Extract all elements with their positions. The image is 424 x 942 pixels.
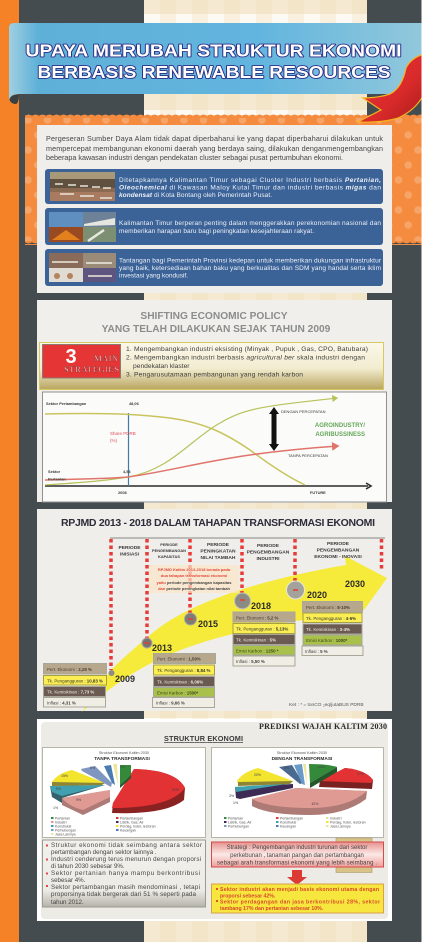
chart: tanpa transformasi — [42, 748, 206, 838]
text block: tanpa transformasi notes: proporsinya tidak bergerak dari 51 % seperti pada — [51, 891, 197, 898]
strategies box — [40, 342, 384, 390]
chart labels — [46, 401, 328, 495]
callout: hasil — [212, 884, 384, 913]
legend: Konstruksi — [280, 820, 297, 824]
pie slices — [235, 764, 373, 815]
table 2013 — [152, 654, 216, 708]
pie labels: 3% — [229, 794, 234, 798]
card 2 — [45, 208, 383, 245]
legend: Pertambangan — [280, 816, 303, 820]
pie labels: 20% — [254, 773, 261, 777]
label: agroindustry: AGROINDUSTRY/ — [315, 423, 365, 429]
card 3 text: yang baik, ketersediaan bahan baku yang berkualitas dan SDM yang handal serta iklim — [119, 265, 381, 272]
period headers: PERIODE — [327, 541, 350, 547]
legend — [51, 816, 156, 836]
arrow: yellow growth — [82, 556, 387, 712]
period headers: PENGEMBANGAN — [247, 550, 290, 556]
panel: prediksi — [37, 719, 392, 921]
period headers: NILAI TAMBAH — [201, 555, 236, 561]
title text — [26, 40, 402, 82]
chart labels: 2008 — [118, 490, 127, 495]
text block: tanpa transformasi notes: Industri cenderung terus menurun dengan proporsi — [51, 856, 201, 863]
table 2009: Tk. Kemiskinan : 7,73 % — [47, 690, 94, 694]
label: share pdrb: Share PDRB — [110, 431, 136, 436]
chart labels: Sektor — [48, 469, 61, 474]
pie labels: 1% — [233, 801, 238, 805]
white right margin strip — [422, 0, 424, 942]
table 2020: Tk. Kemiskinan : 3-4% — [306, 627, 350, 632]
chart: dengan transformasi: DENGAN TRANSFORMASI — [272, 756, 333, 762]
pie slices — [50, 764, 185, 815]
milestone years: 2030 — [345, 579, 365, 589]
card 1 text: Oleochemical di Kawasan Maloy Kutai Timur dan industri berbasis migas dan — [119, 184, 381, 192]
callout: hasil: Sektor perdagangan dan jasa berkontribusi 28%, sektor — [220, 900, 380, 906]
legend: Konstruksi — [55, 824, 72, 828]
legend: Jasa Lainnya — [330, 824, 351, 828]
card 3 text: Tantangan bagi Pemerintah Provinsi kedepan untuk memberikan dukungan infrastruktur — [119, 258, 382, 264]
label: agroindustry: AGRIBUSSINESS — [315, 432, 365, 438]
heading: SHIFTING ECONOMIC POLICY — [140, 311, 288, 322]
callout: strategi — [212, 842, 384, 867]
strategy list: pendekatan klaster — [133, 363, 190, 370]
strategy list — [126, 346, 368, 378]
heading — [102, 311, 331, 335]
timeline rule — [110, 537, 385, 539]
table 2020: Pert. Ekonomi : 8-10% — [306, 605, 350, 610]
card 3 text: investasi yang kondusif. — [119, 272, 188, 280]
pie labels: 5% — [284, 766, 289, 770]
milestones — [108, 581, 304, 676]
legend: Pertambangan — [120, 816, 143, 820]
text block: tanpa transformasi notes: Struktur ekonomi tidak seimbang antara sektor — [51, 842, 202, 849]
label: share pdrb: (%) — [110, 438, 117, 443]
legend: Pertanian — [228, 816, 243, 820]
pie labels: 1% — [53, 806, 58, 810]
period headers: PERIODE — [207, 542, 230, 548]
legend: Industri — [330, 816, 342, 820]
table 2013: Pert. Ekonomi : 1,59% — [157, 656, 201, 662]
table 2018: Emisi Karbon : 1250 * — [236, 648, 279, 654]
chart: tanpa transformasi: TANPA TRANSFORMASI — [94, 756, 150, 762]
chart labels: FUTURE — [310, 490, 326, 495]
callout: strategi: Strategi : Pengembangan industri turunan dari sektor — [227, 845, 367, 851]
arrow: down — [287, 870, 307, 885]
milestone years: 2020 — [307, 590, 327, 600]
card 2 text: Kalimantan Timur berperan penting dalam menggerakkan perekonomian nasional dan — [119, 220, 381, 227]
legend: Industri — [55, 820, 67, 824]
badge: 3 main strategies: 3 — [65, 346, 77, 368]
pie labels: 42% — [311, 802, 319, 806]
heading: YANG TELAH DILAKUKAN SEJAK TAHUN 2009 — [102, 324, 331, 335]
text block: tanpa transformasi notes: pertambangan dengan sektor lainnya . — [51, 849, 157, 856]
table 2020: Inflasi : 5 % — [305, 649, 328, 654]
table 2018: Pert. Ekonomi : 5,2 % — [236, 616, 279, 620]
table 2018: Tk. Kemiskinan : 5% — [236, 638, 276, 642]
curve: tanpa percepatan — [45, 446, 338, 480]
panel: orange dotted backing — [25, 114, 424, 245]
legend: Jasa Lainnya — [55, 832, 76, 836]
photo: energy collage — [49, 212, 116, 242]
badge: 3 main strategies — [42, 344, 120, 378]
legend: Listrik, Gas, Air — [120, 820, 144, 824]
legend: Pertanian — [55, 816, 70, 820]
table 2009: Tk. Pengangguran : 10,83 % — [47, 678, 103, 684]
text block: tanpa transformasi notes — [42, 840, 206, 907]
panel: shifting economic policy — [37, 300, 392, 502]
text block: tanpa transformasi notes: Sektor pertanian hanya mampu berkontribusi — [51, 870, 200, 877]
milestone years: 2015 — [198, 619, 218, 629]
callout: rpjmd note: yaitu periode pengembangan kapasitas — [157, 580, 232, 585]
table 2020 — [302, 602, 363, 656]
callout: hasil: Sektor industri akan menjadi basis ekonomi utama dengan — [220, 887, 379, 893]
legend: Perhubungan — [228, 824, 249, 828]
card 3 — [45, 249, 383, 286]
legend: Keuangan — [120, 828, 136, 832]
strategy list: 2. Mengembangkan industri berbasis agricultural ber skala industri dengan — [126, 354, 365, 362]
milestone years: 2009 — [115, 674, 135, 684]
legend: Perdag, hotel, restoran — [120, 824, 156, 828]
period headers: PENGEMBANGAN — [317, 548, 360, 554]
period headers: INISIASI — [120, 552, 140, 558]
period headers — [118, 541, 362, 562]
pie labels: 5% — [56, 787, 61, 791]
table 2009 — [44, 664, 106, 707]
table 2018 — [233, 612, 295, 666]
chart: dengan transformasi — [212, 748, 384, 838]
period dividers — [111, 539, 382, 670]
panel: intro — [37, 125, 392, 293]
card 1 text — [119, 177, 381, 199]
period headers: PERIODE — [160, 542, 178, 547]
pie labels: 51% — [172, 788, 179, 792]
period headers: KAPASITAS — [158, 554, 180, 559]
callout: strategi: perkebunan , tanaman pangan dan pertambangan — [230, 853, 364, 859]
icon: double arrow — [269, 407, 279, 451]
line chart: sector share curves — [42, 392, 386, 502]
pie labels — [53, 765, 179, 810]
curve: sektor pertambangan — [45, 413, 305, 485]
callout: rpjmd note — [149, 565, 239, 593]
table 2013: Inflasi : 9,66 % — [156, 700, 185, 706]
title ribbon — [9, 23, 424, 104]
callout: rpjmd note: dan periode peningkatan nilai tambah — [158, 586, 230, 591]
heading: RPJMD 2013 - 2018 DALAM TAHAPAN TRANSFORMASI EKONOMI — [61, 517, 375, 529]
table 2018: Inflasi : 5,50 % — [236, 659, 265, 664]
text block: tanpa transformasi notes: Sektor pertambangan masih mendominasi , tetapi — [51, 884, 200, 891]
pie labels: 17% — [357, 772, 364, 776]
pie labels — [229, 765, 364, 806]
intro text: mempercepat membangunan ekonomi daerah yang berdaya saing, dilakukan denganmengembangkan — [46, 144, 383, 153]
period headers: PERIODE — [118, 545, 141, 551]
badge: 3 main strategies: MAIN — [94, 353, 118, 363]
milestone years: 2018 — [251, 601, 271, 611]
card 1 text: Ditetapkannya Kalimantan Timur sebagai Cluster Industri berbasis Pertanian, — [119, 177, 381, 184]
chart labels: 48,06 — [129, 401, 140, 406]
table 2013: Tk. Kemiskinan : 6,06% — [157, 680, 203, 684]
photo: infrastructure collage — [49, 253, 116, 282]
title text: UPAYA MERUBAH STRUKTUR EKONOMI — [26, 40, 402, 60]
table 2018: Tk. Pengangguran : 5,13% — [236, 626, 288, 632]
strategy list: 3. Pengarusutamaan pembangunan yang rendah karbon — [126, 372, 303, 378]
period headers: PENINGKATAN — [200, 548, 236, 554]
pie labels: 8% — [90, 766, 95, 770]
table 2020: Tk. Pengangguran : 4-6% — [306, 616, 356, 621]
legend — [224, 816, 366, 828]
chart labels: TANPA PERCEPATAN — [288, 453, 328, 458]
chart: dengan transformasi: Struktur Ekonomi Kaltim 2030 — [277, 751, 327, 755]
milestone years: 2013 — [152, 643, 172, 653]
title text: BERBASIS RENEWABLE RESOURCES — [38, 62, 390, 82]
callout: hasil: tambang 17% dan pertanian sebesar 10%. — [220, 906, 324, 912]
chart labels: Sektor Pertambangan — [46, 401, 87, 406]
text block: tanpa transformasi notes: sebesar 4%. — [51, 877, 86, 884]
icon: red ribbon tail — [358, 54, 424, 122]
text block: tanpa transformasi notes: tahun 2012. — [51, 899, 84, 906]
legend: Perhubungan — [55, 828, 76, 832]
footnote: Ket : * = tonCO ₂eq/jutaBUS PDRB — [289, 702, 364, 708]
period headers: PERIODE — [257, 543, 280, 549]
pie labels: 10% — [318, 765, 325, 769]
badge: 3 main strategies: STRATEGIES — [64, 364, 119, 374]
table 2013: Tk. Pengangguran : 8,84 % — [157, 668, 211, 673]
table 2020: Emisi Karbon : 1000* — [306, 638, 348, 643]
legend: Keuangan — [280, 824, 296, 828]
callout: hasil: proporsi sebesar 42%. — [220, 894, 276, 900]
pie labels: 15% — [61, 774, 68, 778]
card 1 text: kondensat di Kota Bontang oleh Pemerintah Pusat. — [119, 192, 272, 199]
strategy list: 1. Mengembangkan industri eksisting (Minyak , Pupuk , Gas, CPO, Batubara) — [126, 346, 368, 353]
table 2009: Pert. Ekonomi : 2,28 % — [47, 667, 92, 672]
panel: rpjmd — [37, 509, 392, 712]
callout: rpjmd note: dua tahapan transformasi ekonomi — [161, 573, 227, 578]
heading: PREDIKSI WAJAH KALTIM 2030 — [259, 722, 387, 731]
table 2013: Emisi Karbon : 1500* — [157, 690, 199, 696]
intro text — [46, 134, 383, 162]
pie labels: 4% — [120, 765, 125, 769]
callout: strategi: sebagai arah transformasi ekonomi yang lebih seimbang . — [217, 860, 377, 866]
card 3 text — [119, 258, 382, 280]
photo: industrial cluster — [50, 172, 115, 201]
legend: Perdag, hotel, restoran — [330, 820, 366, 824]
text block: tanpa transformasi notes: di tahun 2030 sebesar 9%. — [51, 863, 125, 870]
pie labels: 9% — [76, 798, 81, 802]
chart labels: DENGAN PERCEPATAN — [281, 409, 326, 414]
period headers: INDUSTRI — [256, 556, 280, 562]
chart labels: Pertanian — [48, 476, 66, 482]
tan backing block — [336, 838, 372, 872]
period headers: PENGEMBANGAN — [152, 548, 186, 553]
chart labels: 4,53 — [123, 469, 131, 474]
card 1 — [45, 169, 383, 204]
intro text: Pergeseran Sumber Daya Alam tidak dapat diperbaharui ke yang dapat diperbaharui dilakukan untuk — [46, 134, 383, 143]
callout: rpjmd note: RPJMD Kaltim 2013-2018 berada pada — [158, 567, 231, 572]
marker line 2008 — [128, 413, 130, 486]
intro text: beberapa kawasan industri dengan pendekatan cluster sebagai pusat pertumbuhan ekonomi. — [46, 153, 343, 162]
card 2 text: memberikan harapan baru bagi peningkatan kesejahteraan rakyat. — [119, 228, 314, 235]
card 2 text — [119, 220, 381, 235]
curve: dengan percepatan — [45, 398, 337, 485]
axis — [45, 483, 371, 489]
milestone years — [115, 579, 365, 684]
chart: tanpa transformasi: Struktur Ekonomi Kaltim 2030 — [99, 751, 149, 755]
subheading: STRUKTUR EKONOMI — [164, 734, 243, 743]
legend: Listrik, Gas, Air — [228, 820, 252, 824]
table 2009: Inflasi : 4,31 % — [47, 700, 76, 706]
period headers: EKONOMI - INOVASI — [314, 554, 362, 560]
